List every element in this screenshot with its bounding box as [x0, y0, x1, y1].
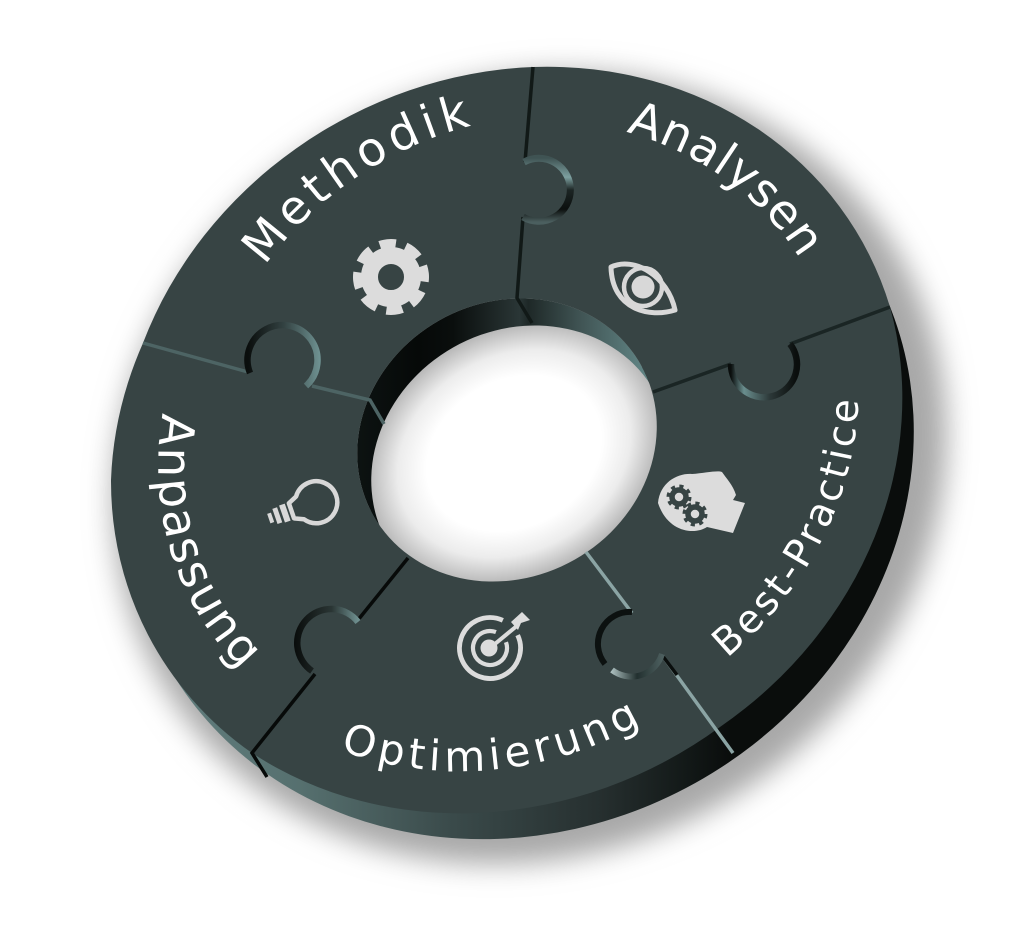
label: Analysen: Analysen: [626, 103, 816, 256]
icon: eye: [611, 264, 675, 313]
centre hole: [371, 325, 671, 609]
label: Anpassung: Anpassung: [148, 413, 258, 669]
seam: Best-Practice / Optimierung: [586, 552, 733, 753]
ring outer side wall: [148, 251, 914, 839]
icon: target with arrow: [449, 607, 531, 689]
seam: Anpassung / Methodik: [143, 325, 384, 424]
ring top face: [111, 67, 902, 813]
seam: Analysen / Best-Practice: [653, 307, 890, 397]
label: Optimierung: Optimierung: [346, 704, 638, 772]
icon: gear: [355, 241, 427, 313]
puzzle ring: [111, 66, 914, 840]
seam: Optimierung / Anpassung: [252, 558, 408, 777]
label: Best-Practice: Best-Practice: [711, 401, 858, 656]
ring inner wall: [357, 298, 657, 582]
drop shadow: [113, 72, 947, 864]
icon: head with gears: [658, 471, 745, 533]
label: Methodik: Methodik: [240, 96, 471, 262]
seam: Methodik / Analysen: [517, 67, 570, 323]
icon: light bulb: [262, 476, 343, 538]
